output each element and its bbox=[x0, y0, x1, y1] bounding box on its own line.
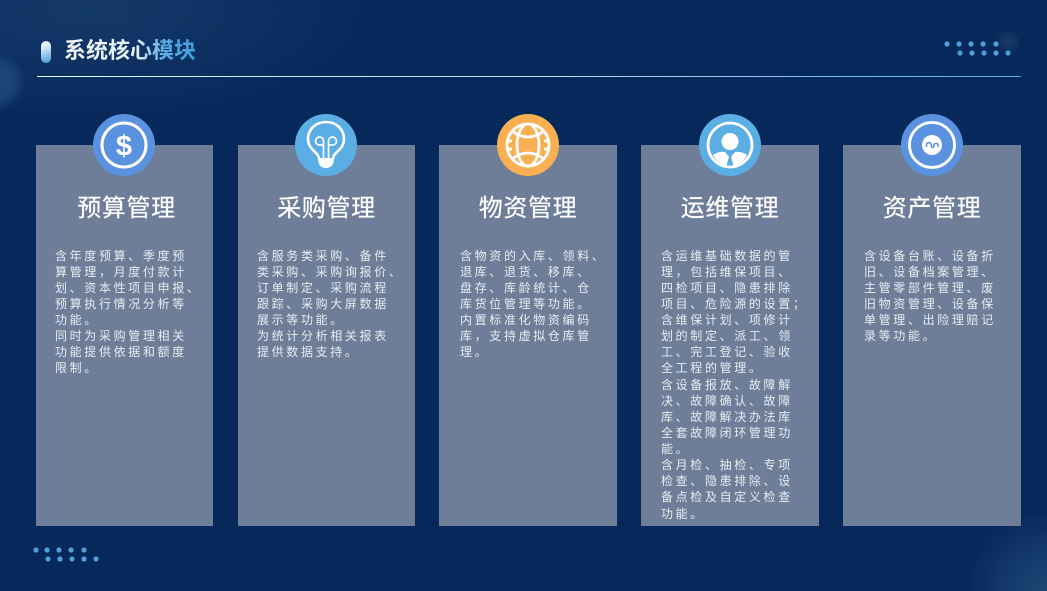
description: 类采购、采购询报价、 bbox=[257, 265, 404, 279]
description: 退库、退货、移库、 bbox=[460, 265, 592, 279]
description: 限制。 bbox=[55, 361, 99, 375]
description: 功能。 bbox=[55, 313, 99, 327]
description: 检查、隐患排除、设 bbox=[661, 474, 793, 488]
heading: 物资管理 bbox=[479, 194, 577, 222]
panel background bbox=[641, 145, 819, 526]
panel background bbox=[439, 145, 617, 526]
description: 含设备报放、故障解 bbox=[661, 378, 793, 392]
description: 含月检、抽检、专项 bbox=[661, 458, 793, 472]
description: 含维保计划、项修计 bbox=[661, 313, 793, 327]
description: 盘存、库龄统计、仓 bbox=[460, 281, 592, 295]
panel: 资产管理 bbox=[843, 114, 1021, 526]
heading: 运维管理 bbox=[681, 194, 779, 222]
description: 库，支持虚拟仓库管 bbox=[460, 329, 592, 343]
description: 含运维基础数据的管 bbox=[661, 248, 793, 262]
description: 含服务类采购、备件 bbox=[257, 248, 389, 262]
icon: light bulb bbox=[295, 114, 357, 176]
panel: 物资管理 bbox=[439, 114, 617, 526]
description: 划的制定、派工、领 bbox=[661, 329, 793, 343]
description: 提供数据支持。 bbox=[257, 345, 360, 359]
description: 算管理，月度付款计 bbox=[55, 265, 187, 279]
description: 功能。 bbox=[661, 506, 705, 520]
description: 全工程的管理。 bbox=[661, 361, 764, 375]
description: 能。 bbox=[661, 442, 690, 456]
icon: dollar coin bbox=[93, 114, 155, 176]
title marker pill bbox=[41, 41, 51, 63]
header rule bbox=[37, 76, 1021, 77]
description: 库、故障解决办法库 bbox=[661, 410, 793, 424]
description: 录等功能。 bbox=[864, 329, 937, 343]
icon: globe bbox=[497, 114, 559, 176]
description: 跟踪、采购大屏数据 bbox=[257, 297, 389, 311]
description: 项目、危险源的设置； bbox=[661, 297, 808, 311]
description: 含设备台账、设备折 bbox=[864, 248, 996, 262]
description: 同时为采购管理相关 bbox=[55, 329, 187, 343]
description: 单管理、出险理赔记 bbox=[864, 313, 996, 327]
description: 含年度预算、季度预 bbox=[55, 248, 187, 262]
panel background bbox=[843, 145, 1021, 526]
description: 划、资本性项目申报、 bbox=[55, 281, 202, 295]
description: 功能提供依据和额度 bbox=[55, 345, 187, 359]
description: 库货位管理等功能。 bbox=[460, 297, 592, 311]
description: 主管零部件管理、废 bbox=[864, 281, 996, 295]
heading: 资产管理 bbox=[883, 194, 981, 222]
description: 内置标准化物资编码 bbox=[460, 313, 592, 327]
description: 旧、设备档案管理、 bbox=[864, 265, 996, 279]
panel background bbox=[238, 145, 415, 526]
heading: 采购管理 bbox=[277, 194, 376, 222]
description: 订单制定、采购流程 bbox=[257, 281, 389, 295]
panel: 运维管理 bbox=[641, 114, 819, 526]
panel background bbox=[36, 145, 213, 526]
description: 预算执行情况分析等 bbox=[55, 297, 187, 311]
description bbox=[55, 248, 202, 375]
description bbox=[460, 248, 607, 359]
icon: dollar coin: $ bbox=[116, 130, 132, 162]
description: 决、故障确认、故障 bbox=[661, 394, 793, 408]
description bbox=[661, 248, 808, 520]
decorative dots: bottom left bbox=[33, 547, 99, 562]
description: 理，包括维保项目、 bbox=[661, 265, 793, 279]
decorative dots: top right bbox=[944, 41, 1011, 56]
icon: ring badge bbox=[901, 114, 963, 176]
description: 展示等功能。 bbox=[257, 313, 345, 327]
description: 旧物资管理、设备保 bbox=[864, 297, 996, 311]
description: 工、完工登记、验收 bbox=[661, 345, 793, 359]
panel: 采购管理 bbox=[238, 114, 415, 526]
description bbox=[864, 248, 996, 343]
icon: person bbox=[699, 114, 761, 176]
title: 系统核心模块 bbox=[64, 38, 196, 63]
panel: 预算管理 bbox=[36, 114, 213, 526]
description: 为统计分析相关报表 bbox=[257, 329, 389, 343]
description bbox=[257, 248, 404, 359]
description: 理。 bbox=[460, 345, 489, 359]
heading: 预算管理 bbox=[77, 194, 176, 222]
description: 全套故障闭环管理功 bbox=[661, 426, 793, 440]
description: 含物资的入库、领料、 bbox=[460, 248, 607, 262]
description: 备点检及自定义检查 bbox=[661, 490, 793, 504]
description: 四检项目、隐患排除 bbox=[661, 281, 793, 295]
